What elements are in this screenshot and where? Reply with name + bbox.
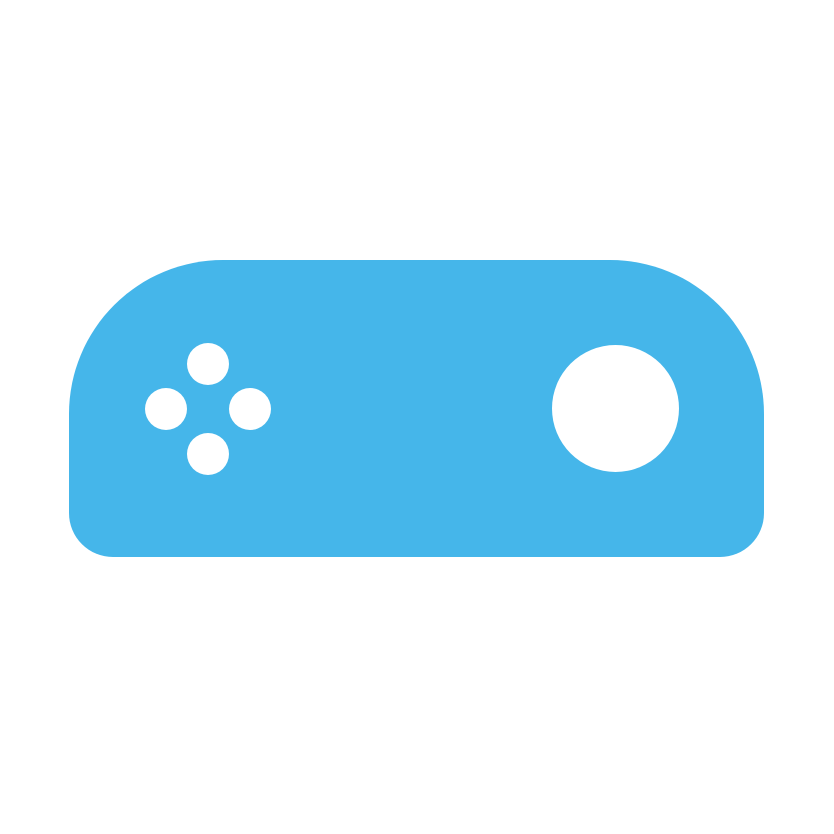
directional buttons: [145, 343, 271, 475]
joystick: [552, 345, 679, 472]
controller body: [69, 260, 764, 557]
